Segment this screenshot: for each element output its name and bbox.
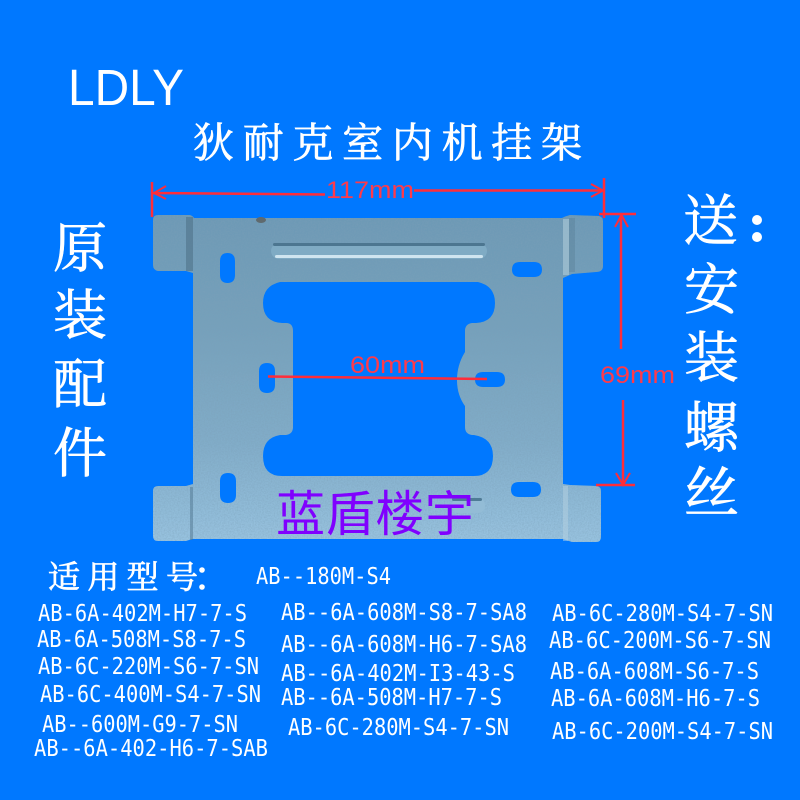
compatible model list: AB--180M-S4 bbox=[256, 562, 391, 590]
left vertical label: original parts: 装 bbox=[53, 286, 107, 346]
right vertical label: free mounting screws bbox=[683, 191, 740, 524]
left vertical label: original parts: 原 bbox=[53, 219, 107, 279]
compatible models heading: 适用型号 bbox=[48, 559, 198, 595]
ear fold shading bbox=[186, 217, 575, 541]
title: 狄耐克室内机挂架 bbox=[193, 120, 582, 166]
compatible model list: AB-6C-400M-S4-7-SN bbox=[40, 680, 261, 708]
compatible model list: AB-6C-280M-S4-7-SN bbox=[288, 713, 509, 741]
mounting bracket illustration bbox=[153, 215, 603, 542]
bottom slot remnant bbox=[452, 498, 485, 513]
colon dots bbox=[752, 215, 762, 242]
compatible model list: AB-6A-508M-S8-7-S bbox=[37, 625, 246, 653]
compatible model list: AB--6A-402-H6-7-SAB bbox=[34, 734, 268, 762]
right vertical label: free mounting screws: 安 bbox=[684, 260, 739, 321]
compatible model list: AB--6A-402M-I3-43-S bbox=[281, 659, 515, 687]
compatible model list: AB--6A-608M-H6-7-SA8 bbox=[281, 630, 527, 658]
compatible model list: AB--6A-608M-S8-7-SA8 bbox=[281, 598, 527, 626]
right vertical label: free mounting screws: 丝 bbox=[684, 463, 739, 524]
right vertical label: free mounting screws: 螺 bbox=[684, 398, 740, 459]
watermark text: 蓝盾楼宇 bbox=[276, 488, 474, 542]
compatible model list: AB-6C-220M-S6-7-SN bbox=[38, 652, 259, 680]
width dimension 117mm bbox=[152, 177, 604, 218]
top long slot bbox=[271, 243, 487, 259]
compatible model list: AB-6C-200M-S4-7-SN bbox=[552, 717, 773, 745]
compatible model list: AB--6A-508M-H7-7-S bbox=[281, 683, 502, 711]
compatible model list: AB--600M-G9-7-SN bbox=[42, 710, 238, 738]
compatible model list: AB-6A-608M-H6-7-S bbox=[551, 684, 760, 712]
left vertical label: original parts bbox=[53, 219, 107, 484]
rust spot bbox=[256, 217, 266, 223]
compatible model list: AB-6A-608M-S6-7-S bbox=[550, 657, 759, 685]
compatible model list: AB-6C-280M-S4-7-SN bbox=[552, 599, 773, 627]
compatible model list: AB-6A-402M-H7-7-S bbox=[38, 599, 247, 627]
left vertical label: original parts: 件 bbox=[53, 424, 107, 484]
width dimension 117mm: 117mm bbox=[326, 177, 414, 204]
hole spacing dimension 60mm: 60mm bbox=[350, 352, 425, 379]
compatible model list bbox=[34, 562, 773, 762]
compatible model list: AB-6C-200M-S6-7-SN bbox=[549, 626, 771, 654]
left vertical label: original parts: 配 bbox=[53, 355, 107, 415]
right vertical label: free mounting screws: 装 bbox=[684, 328, 739, 389]
height dimension 69mm: 69mm bbox=[600, 362, 675, 389]
height dimension 69mm bbox=[596, 214, 675, 485]
right vertical label: free mounting screws: 送 bbox=[683, 191, 738, 252]
brand logo text: LDLY bbox=[68, 59, 184, 116]
